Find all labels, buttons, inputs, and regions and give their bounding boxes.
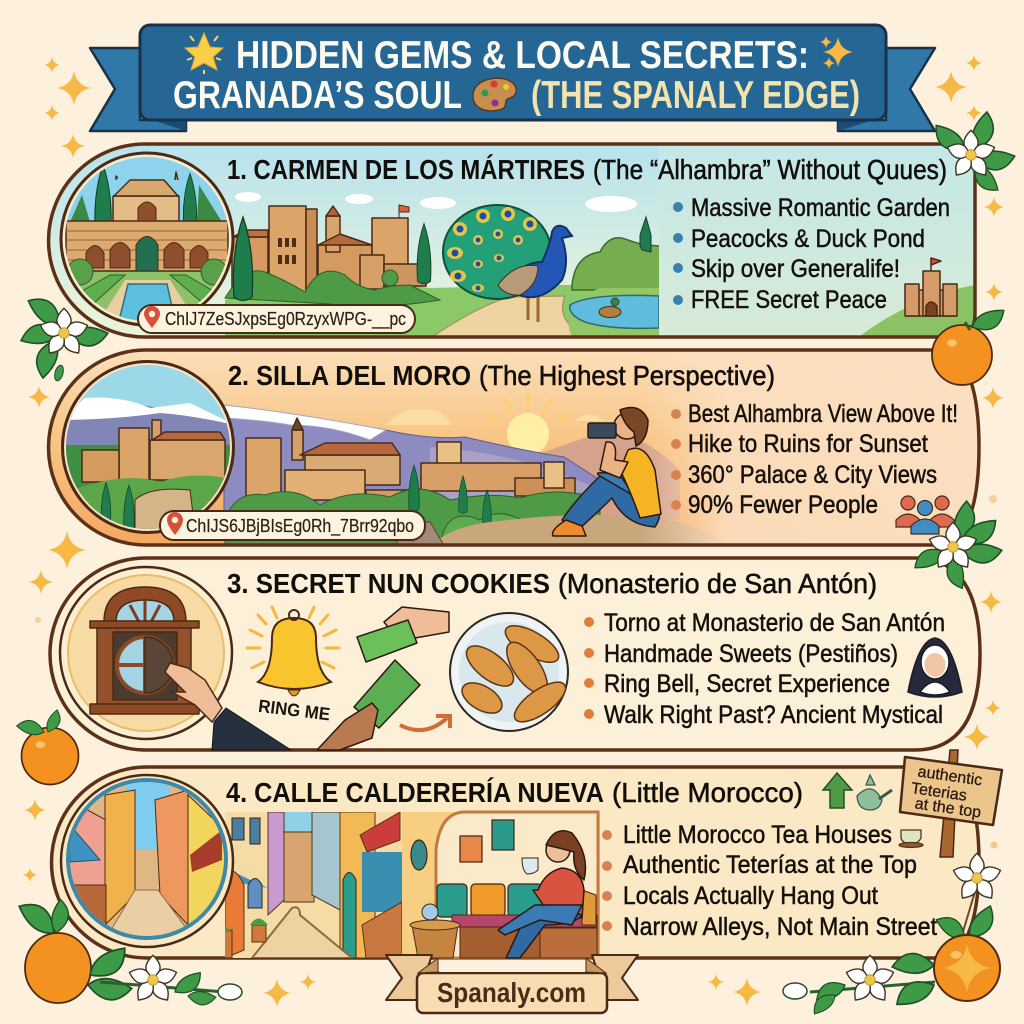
panel 2: Silla del Moro xyxy=(49,350,980,547)
bullet list 2: 90% Fewer People xyxy=(688,491,878,519)
bullet list 3: Torno at Monasterio de San Antón xyxy=(604,609,945,637)
panel background xyxy=(50,143,980,340)
panel heading: (Little Morocco) xyxy=(612,777,803,808)
tea house interior with woman xyxy=(402,812,600,958)
icon: sparkles xyxy=(820,36,853,69)
icon: group of people xyxy=(896,496,954,534)
icon: pin label 1 xyxy=(138,305,415,333)
title subtitle: (THE SPANALY EDGE) xyxy=(531,74,860,117)
bullet list 3: Handmade Sweets (Pestiños) xyxy=(604,640,898,668)
bullet list 2: Hike to Ruins for Sunset xyxy=(688,430,928,458)
bullet list 1: Peacocks & Duck Pond xyxy=(691,225,925,253)
decoration: right flower xyxy=(912,500,1002,588)
circle vignette: Alhambra view xyxy=(60,360,235,540)
panel heading: 3. SECRET NUN COOKIES xyxy=(227,568,550,599)
arrow to cookies xyxy=(400,716,450,730)
title banner xyxy=(90,25,935,131)
photographer figure xyxy=(553,408,661,536)
banner tails xyxy=(90,48,935,131)
panel 1: Carmen de los Mártires xyxy=(49,143,980,340)
circle vignette: torno window xyxy=(60,567,291,750)
bullet list 1 xyxy=(673,194,950,314)
panel heading xyxy=(228,360,775,391)
panel heading: 2. SILLA DEL MORO xyxy=(228,360,471,391)
title line one: HIDDEN GEMS & LOCAL SECRETS: xyxy=(236,34,809,77)
decoration: left flower xyxy=(21,291,108,382)
panel background xyxy=(50,558,980,750)
bullet list 3: Ring Bell, Secret Experience xyxy=(604,670,890,698)
icon: small castle xyxy=(905,258,957,316)
bullet list 3 xyxy=(584,609,945,729)
circle vignette: palace garden xyxy=(60,153,235,335)
bullet list 3: Walk Right Past? Ancient Mystical xyxy=(604,701,943,729)
panel background xyxy=(50,350,980,547)
bullet list 2 xyxy=(671,400,958,519)
panel heading: (Monasterio de San Antón) xyxy=(558,568,877,599)
icon: pin label 2: ChIJS6JBjBIsEg0Rh_7Brr92qbo xyxy=(186,516,414,537)
panel background xyxy=(52,767,979,958)
panel heading xyxy=(227,154,947,185)
title line two: GRANADA’S SOUL xyxy=(173,74,462,117)
bullet list 2: Best Alhambra View Above It! xyxy=(688,400,958,428)
landscape scene xyxy=(225,192,660,340)
decoration: bottom left orange and flower xyxy=(18,895,242,1009)
signpost: Teterias xyxy=(910,780,968,805)
icon: nun xyxy=(908,638,962,697)
panel heading xyxy=(227,568,877,599)
bullet list 1: Massive Romantic Garden xyxy=(691,194,950,222)
bullet list 4: Authentic Teterías at the Top xyxy=(623,851,917,879)
footer brand text: Spanaly.com xyxy=(437,977,586,1008)
bullet list 4: Narrow Alleys, Not Main Street xyxy=(623,913,937,941)
icon: bell xyxy=(247,607,339,724)
illustration: payment hands and bills xyxy=(317,607,449,750)
pond with duck xyxy=(568,288,660,337)
icon: pin label 1: ChIJ7ZeSJxpsEg0RzyxWPG-__pc xyxy=(165,309,406,330)
bullet list 2: 360° Palace & City Views xyxy=(688,461,937,489)
signpost: at the top xyxy=(914,795,982,822)
circle vignette: alley xyxy=(60,775,233,947)
bullet list 1: Skip over Generalife! xyxy=(691,255,900,283)
banner body xyxy=(140,25,886,120)
icon: up arrow xyxy=(823,773,852,808)
panel outline xyxy=(49,350,979,545)
panel outline xyxy=(49,144,975,337)
icon: pin label 2 xyxy=(160,511,425,540)
icon: palette xyxy=(473,78,516,111)
icon: tea cup xyxy=(899,830,923,848)
bullet list 4: Locals Actually Hang Out xyxy=(623,882,878,910)
panel heading: (The “Alhambra” Without Quues) xyxy=(593,154,947,185)
bullet list 1: FREE Secret Peace xyxy=(691,286,887,314)
icon: glowing star xyxy=(185,33,223,74)
footer ribbon xyxy=(386,955,638,1013)
street scene xyxy=(225,812,402,958)
panel heading: 1. CARMEN DE LOS MÁRTIRES xyxy=(227,154,585,185)
peacock xyxy=(443,205,572,322)
signpost: authentic xyxy=(917,764,983,789)
panel heading: (The Highest Perspective) xyxy=(479,360,775,391)
decoration: right lower flower xyxy=(951,853,1003,935)
bullets tinted area xyxy=(640,351,980,545)
bullet list 4: Little Morocco Tea Houses xyxy=(623,821,892,849)
sunset scene xyxy=(224,394,735,547)
bell caption: RING ME xyxy=(257,696,331,724)
panel 4: Calle Caldereria Nueva xyxy=(52,750,1002,958)
icon: teapot xyxy=(857,775,892,810)
panel 3: Secret Nun Cookies xyxy=(50,558,980,750)
plate of pestiños xyxy=(450,613,571,731)
decoration: right orange xyxy=(932,309,1007,385)
decoration: bottom right orange and flower xyxy=(783,905,1001,1015)
decoration: left orange xyxy=(16,709,79,784)
signpost xyxy=(900,750,1002,857)
bullets tinted area xyxy=(659,145,979,337)
bullet list 4 xyxy=(602,821,937,941)
decoration: top right flower xyxy=(930,111,1015,196)
panel heading: 4. CALLE CALDERERÍA NUEVA xyxy=(226,777,604,808)
